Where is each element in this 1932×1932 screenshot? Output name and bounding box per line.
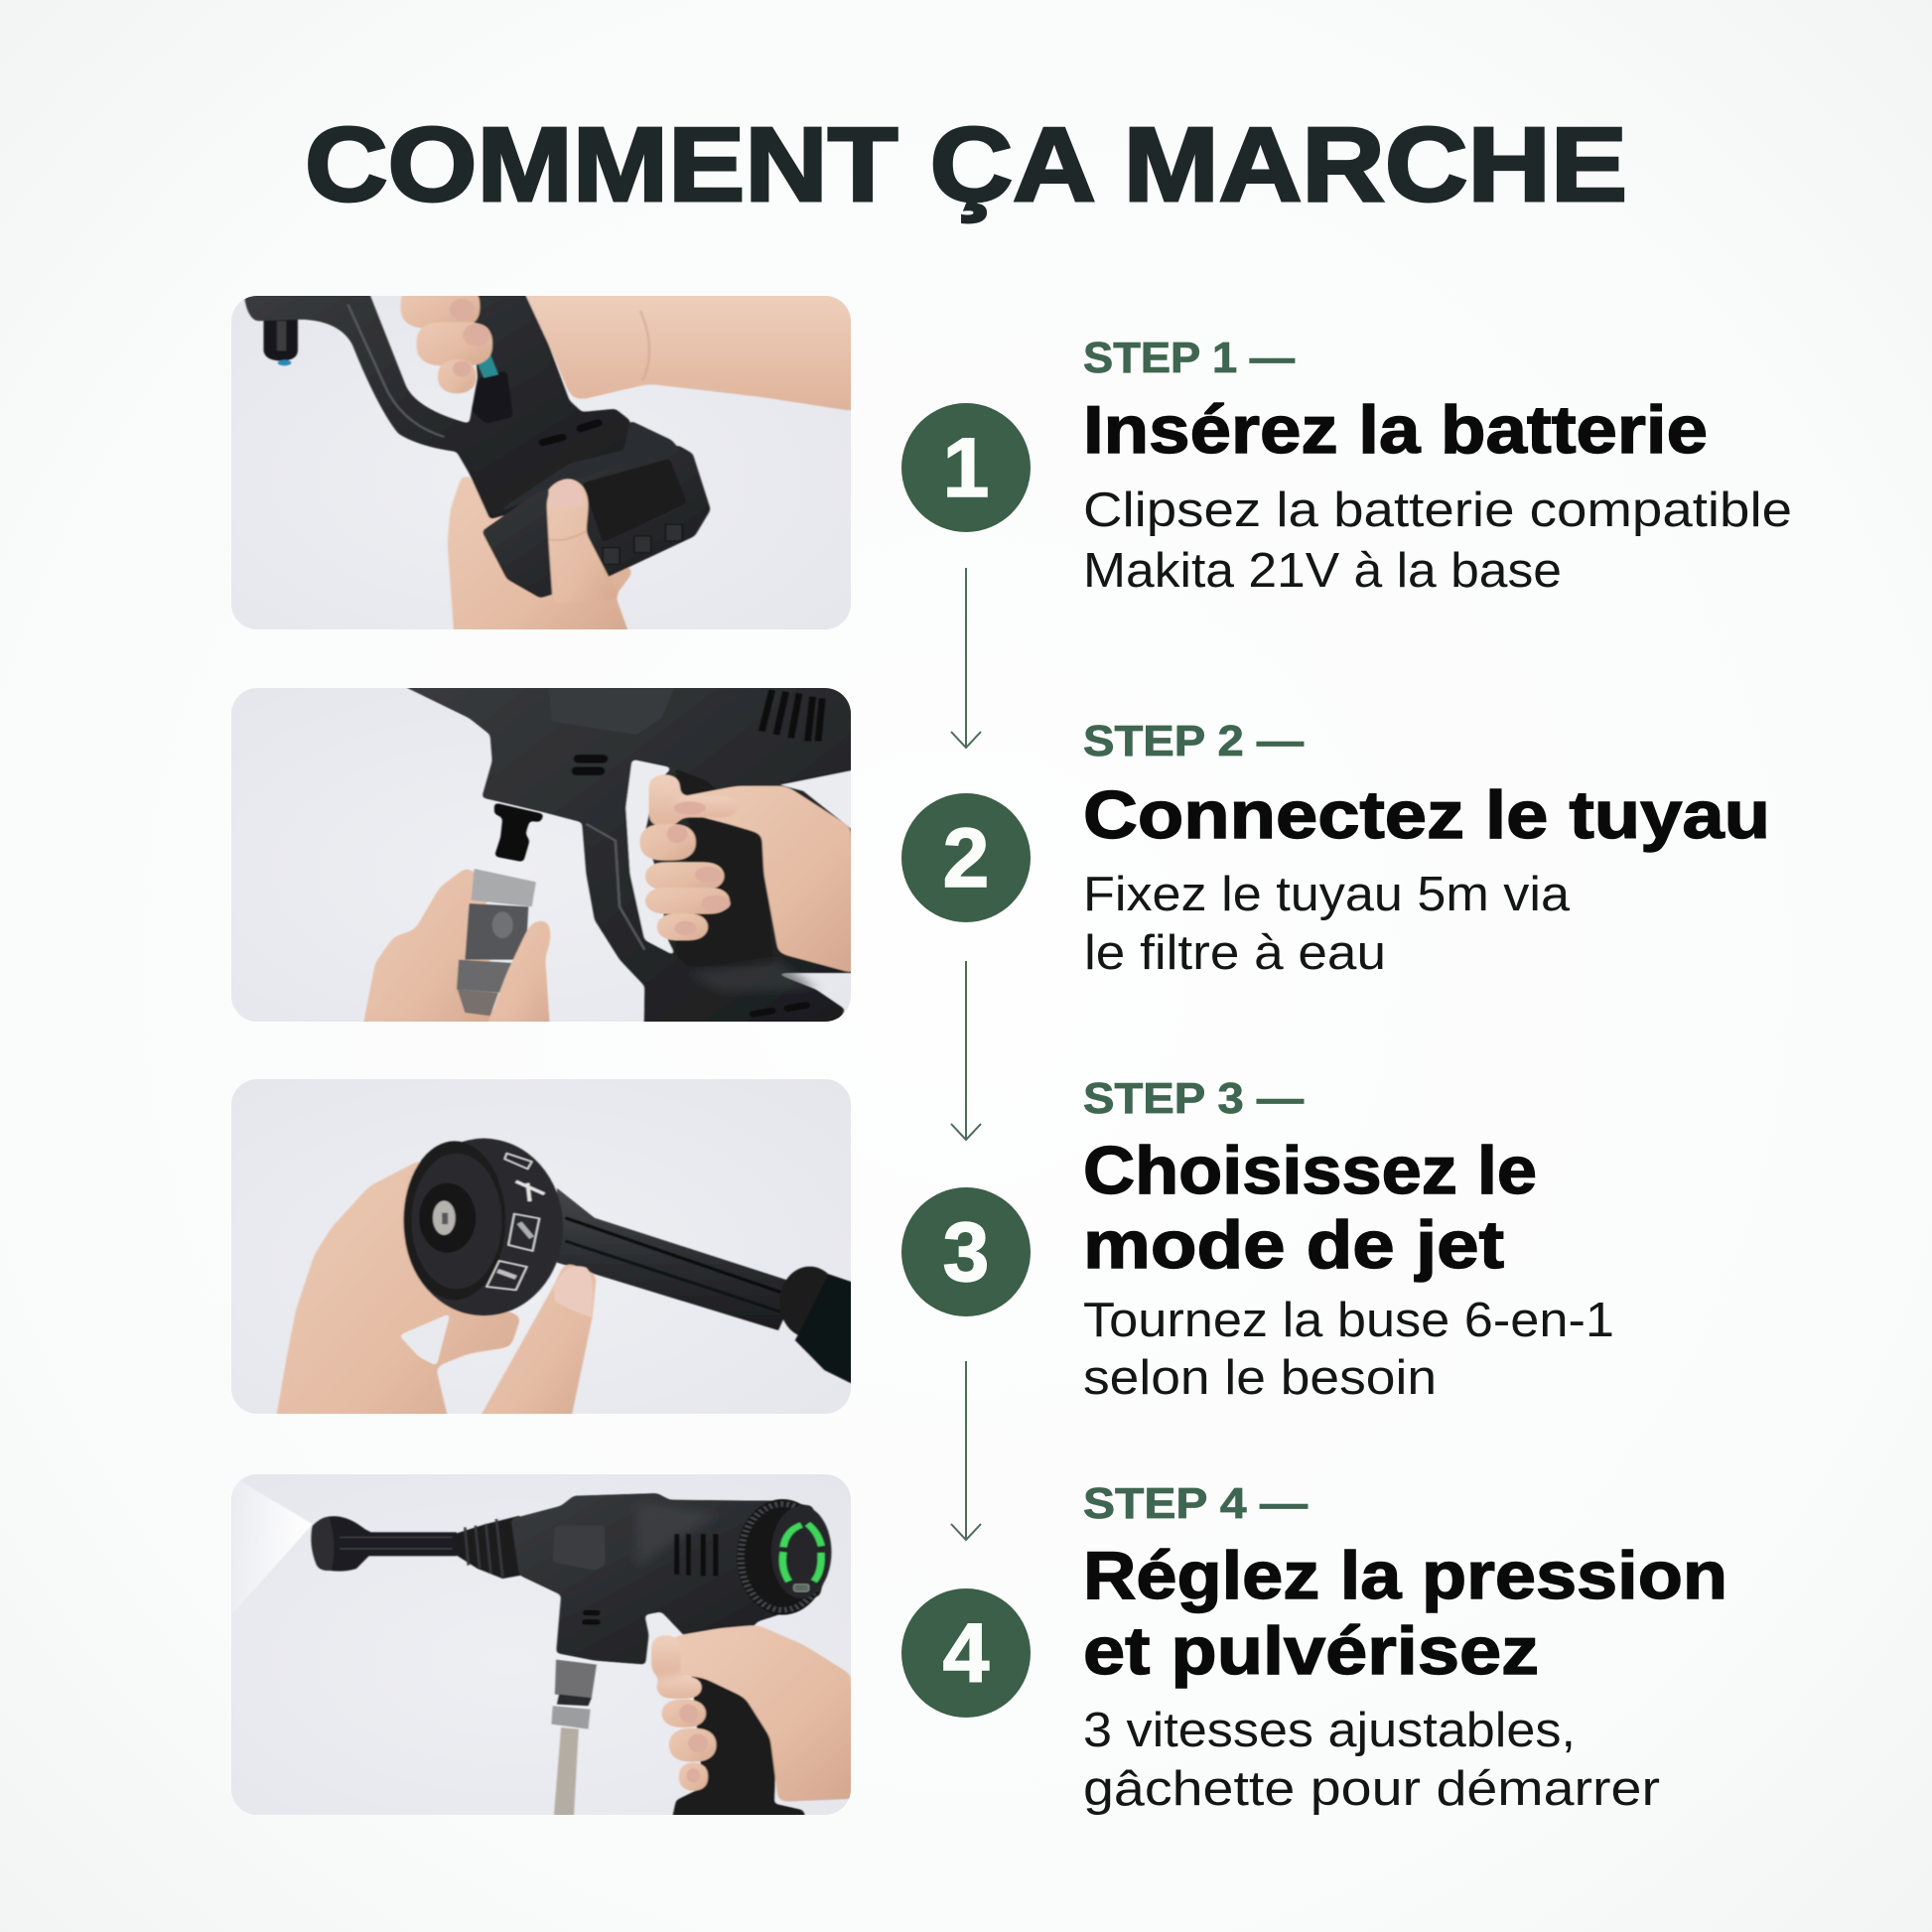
arrow: step 2 to 3 [951,961,981,1140]
upper hand [401,281,858,412]
text block: step 2: le filtre à eau [1084,926,1386,980]
braided hose [554,1727,579,1820]
tap connector [494,802,544,862]
gripping hand [651,1625,858,1802]
text block: step 3: STEP 3 — [1083,1074,1304,1123]
grip [674,767,774,966]
text block: step 4: Réglez la pression [1083,1538,1727,1613]
panel: step 2 photo, connecting the hose [231,678,858,1039]
panel: step 1 photo, inserting the battery [231,281,858,642]
gap between fingers [399,1313,451,1366]
text block: step 4: gâchette pour démarrer [1083,1762,1660,1816]
text block: step 2: Connectez le tuyau [1083,777,1770,853]
base highlight [686,960,816,993]
green LED ring [782,1524,821,1582]
step 3: number badge: 3 [943,1205,989,1299]
trigger [472,370,513,424]
text block: step 4: 3 vitesses ajustables, [1083,1704,1576,1757]
step 4: number badge [901,1588,1031,1718]
side slots [572,755,811,1018]
text block: step 1: STEP 1 — [1083,334,1295,382]
gun body [405,688,851,1022]
text block: step 4 [1083,1479,1727,1816]
hose connector [551,1660,597,1729]
body vents [677,1534,716,1576]
infographic page [231,125,1790,1815]
icon: nozzle [263,308,298,365]
fingertip [481,1263,597,1414]
step 4: number badge: 4 [943,1606,990,1700]
rear vents [761,690,822,742]
text block: step 2: STEP 2 — [1083,717,1304,765]
gun arm and grip [243,281,636,519]
trigger accent [477,354,499,379]
arrow: step 3 to 4 [951,1361,981,1540]
step 3: number badge [901,1187,1031,1316]
step 1: number badge [901,403,1031,532]
text block: step 3: Choisissez le [1083,1133,1537,1208]
nozzle head [403,1139,563,1315]
hose filter [457,869,536,1016]
text block: step 4: STEP 4 — [1083,1479,1308,1528]
nozzle and wand [311,1516,457,1571]
text block: step 1: Makita 21V à la base [1083,544,1562,598]
wand [557,1188,858,1387]
text block: step 1 [1083,334,1792,598]
text block: step 1: Clipsez la batterie compatible [1083,483,1792,537]
arrow: step 1 to 2 [951,568,981,748]
text block: step 2: Fixez le tuyau 5m via [1083,868,1571,921]
battery [482,420,711,599]
gripping hand [639,774,858,975]
text block: step 2 [1083,717,1770,980]
hand behind nozzle [276,1162,520,1414]
ribbed collar [455,1516,540,1579]
text block: step 1: Insérez la batterie [1083,392,1708,468]
text block: step 3: Tournez la buse 6-en-1 [1083,1294,1614,1347]
grip [669,1668,810,1834]
text block: step 4: et pulvérisez [1083,1613,1539,1689]
step 1: number badge: 1 [943,421,989,514]
text block: step 3 [1083,1074,1614,1405]
text block: step 3: selon le besoin [1083,1351,1437,1405]
gun body [511,1493,831,1665]
rear ribbed dial [737,1499,831,1615]
panel: step 3 photo, turning the nozzle [231,1079,858,1437]
step 2: number badge: 2 [943,811,989,904]
step 2: number badge [901,793,1031,922]
holding hand on filter (behind) [363,869,493,1022]
panel: step 4 photo, spraying [231,1474,858,1834]
guard opening [625,759,676,956]
vents [537,418,604,447]
title: COMMENT ÇA MARCHE [305,106,1627,223]
nozzle mode icons [486,1154,544,1290]
thumb [488,920,551,1022]
text block: step 3: mode de jet [1083,1207,1504,1283]
water spray [231,1476,313,1615]
thumb [546,479,621,604]
lower hand, back part [447,477,631,629]
